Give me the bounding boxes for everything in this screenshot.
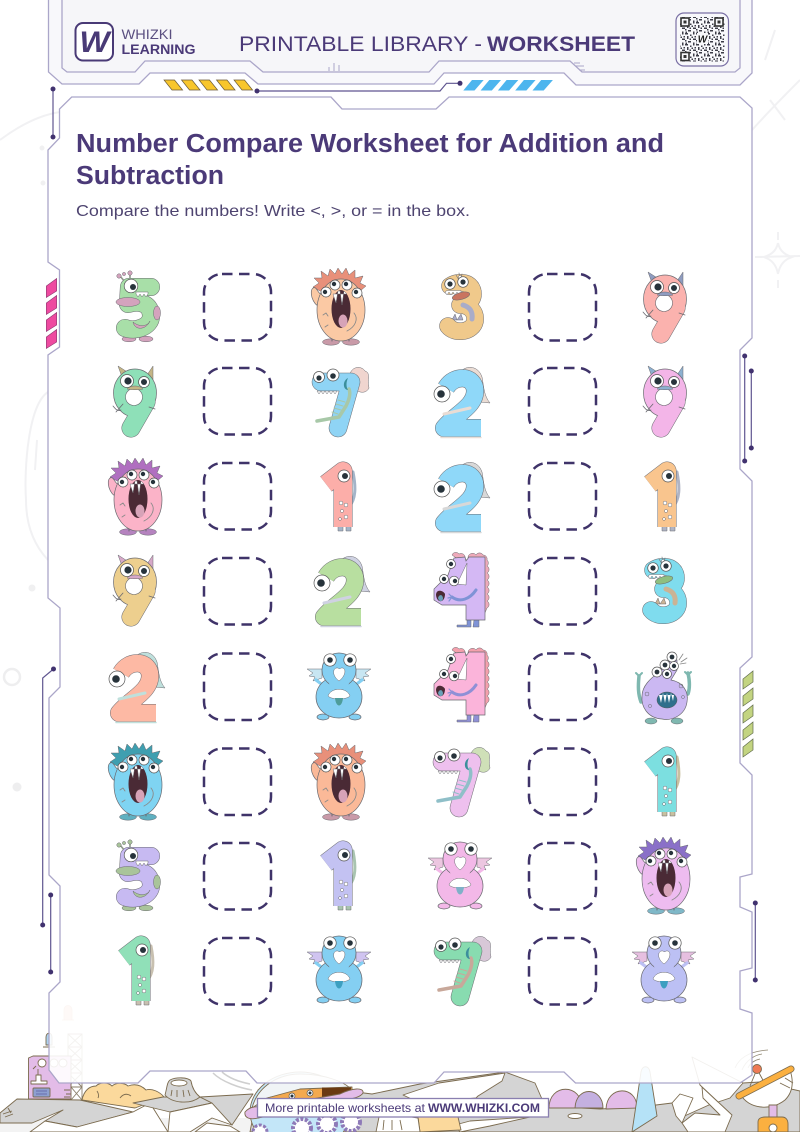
ground — [250, 1072, 800, 1132]
blue pin — [43, 1033, 55, 1047]
worksheet title — [76, 130, 664, 190]
header inner frame — [62, 0, 740, 72]
worksheet title: Subtraction — [76, 162, 224, 190]
logo: WHIZKI — [122, 27, 172, 42]
mid grey rock — [200, 1094, 253, 1125]
header outer frame — [48, 0, 752, 85]
monster row 5: 2 and 8, 4 and 6 — [109, 647, 691, 724]
yellow stripes — [164, 80, 253, 90]
monster row 3: 0 and 1, 2 and 1 — [108, 458, 679, 535]
blue stripes — [463, 80, 553, 90]
white shard centre — [403, 1073, 505, 1103]
tower lattice — [68, 1034, 82, 1100]
monster row 7: 5 and 1, 8 and 0 — [116, 837, 691, 914]
rocket pin — [62, 1006, 74, 1020]
monster row 8: 1 and 8, 7 and 8 — [124, 936, 696, 1005]
monster row 2: 9 and 7, 2 and 9 — [113, 366, 686, 438]
grey cone rock — [133, 1097, 212, 1112]
blue cone — [632, 1067, 657, 1132]
orange rock under banner — [418, 1117, 461, 1132]
purple domes — [549, 1089, 582, 1108]
right white shard — [682, 1057, 743, 1132]
QR code — [676, 13, 728, 66]
header title: WORKSHEET — [487, 33, 635, 56]
footer banner — [258, 1098, 548, 1117]
monster row 4: 9 and 2, 4 and 3 — [113, 552, 684, 627]
helmet creature — [245, 1072, 363, 1132]
faint radar arcs — [213, 1072, 252, 1090]
QR code: W — [698, 34, 709, 46]
instructions: Compare the numbers! Write <, >, or = in the box. — [76, 203, 470, 220]
monster row 1: 5 and 0, 3 and 9 — [116, 268, 686, 345]
header title — [239, 33, 635, 56]
answer boxes — [204, 274, 596, 1004]
satellite dish — [735, 1050, 793, 1132]
bottom scene: rubble landscape — [0, 1006, 800, 1132]
header title: PRINTABLE LIBRARY - — [239, 33, 482, 56]
footer banner: WWW.WHIZKI.COM — [428, 1101, 540, 1115]
pink stripes — [46, 278, 57, 348]
machine — [28, 1056, 71, 1099]
worksheet title: Number Compare Worksheet for Addition and — [76, 130, 664, 158]
green stripes — [743, 671, 753, 757]
logo: LEARNING — [122, 42, 196, 57]
monster row 6: 0 and 0, 7 and 1 — [108, 743, 679, 820]
background decoration — [0, 30, 800, 792]
header tick marks — [329, 63, 585, 71]
orange mound — [82, 1083, 164, 1108]
circuit lines — [40, 81, 758, 983]
base strip — [0, 1118, 800, 1132]
logo — [76, 23, 196, 60]
logo: W — [80, 26, 112, 59]
footer banner: More printable worksheets at — [265, 1101, 426, 1115]
main panel frame — [48, 97, 752, 1083]
left slab — [0, 1099, 133, 1127]
